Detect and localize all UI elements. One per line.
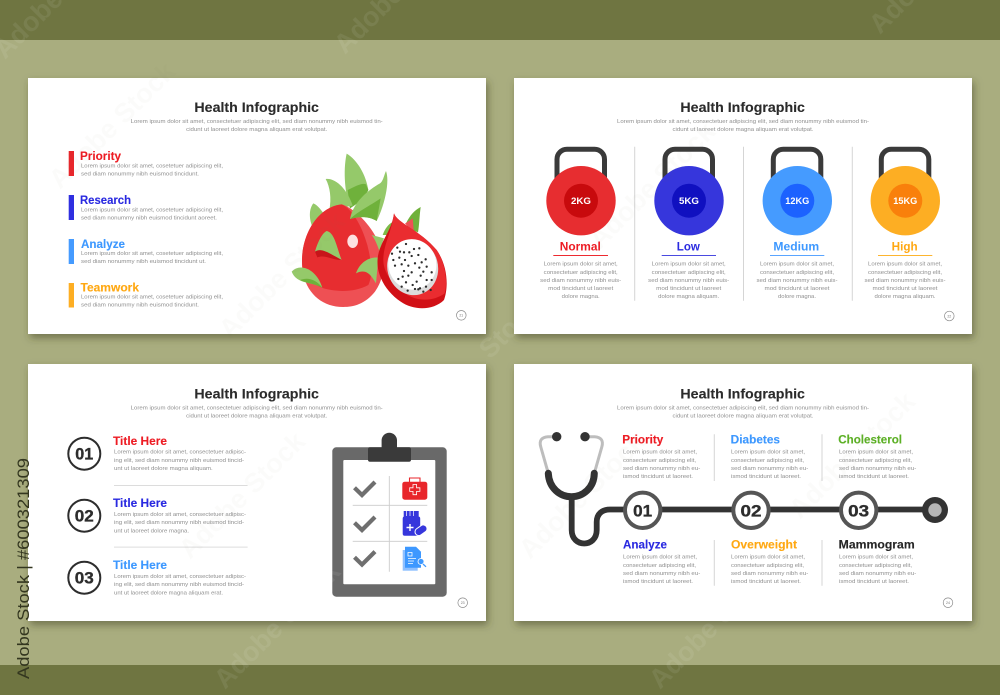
block: Priority: ismod tincidunt ut laoreet. [623, 474, 693, 480]
intro text: Lorem ipsum dolor sit amet, consectetuer adipiscing elit, sed diam nonummy nibh euismod tin- [617, 406, 869, 412]
step 01: unt ut laoreet dolore magna aliquam. [114, 466, 213, 472]
page number 21: 21 [459, 314, 463, 318]
intro text: Lorem ipsum dolor sit amet, consectetuer adipiscing elit, sed diam nonummy nibh euismod tin- [617, 119, 869, 125]
block: Overweight [731, 540, 808, 585]
block: Mammogram: ismod tincidunt ut laoreet. [839, 579, 909, 585]
kettlebell: 5KG Low: consectetuer adipiscing elit, [652, 270, 726, 276]
block: Diabetes: sed diam nonummy nibh eu- [731, 466, 808, 472]
illustration: stethoscope timeline [540, 432, 948, 544]
block: Priority: Lorem ipsum dolor sit amet, [623, 450, 697, 456]
kettlebell: 5KG Low: dolore magna aliquam. [658, 294, 720, 300]
block: Diabetes: consectetuer adipiscing elit, [731, 458, 804, 464]
step 02: unt ut laoreet dolore magna. [114, 528, 189, 534]
title: Health Infographic [680, 386, 805, 402]
page number 24: 24 [946, 601, 950, 605]
block: Analyze: ismod tincidunt ut laoreet. [623, 579, 693, 585]
block: Cholesterol: sed diam nonummy nibh eu- [839, 466, 916, 472]
step 02: ing elit, sed diam nonummy nibh euismod tincid- [114, 520, 244, 526]
item: Teamwork: Teamwork [80, 282, 140, 294]
block: Priority: Priority [622, 435, 664, 447]
item: Analyze: Lorem ipsum dolor sit amet, cosetetuer adipiscing elit, [81, 251, 223, 257]
kettlebell: 15KG High: Lorem ipsum dolor sit amet, [868, 262, 942, 268]
kettlebell: 12KG Medium: sed diam nonummy nibh euis- [756, 278, 838, 284]
kettlebell: 5KG Low [648, 149, 729, 300]
block: Overweight: Overweight [731, 540, 797, 552]
icon: first aid kit [402, 478, 427, 500]
watermark: Adobe Stock [513, 426, 652, 564]
item: Research: sed diam nonummy nibh euismod tincidunt aoreet. [81, 215, 217, 221]
illustration: dragon fruit [292, 154, 447, 308]
kettlebell: 2KG Normal: Lorem ipsum dolor sit amet, [544, 262, 618, 268]
block: Overweight: Lorem ipsum dolor sit amet, [731, 555, 805, 561]
panel: numbered list and clipboard [28, 364, 486, 621]
intro text: Lorem ipsum dolor sit amet, consectetuer adipiscing elit, sed diam nonummy nibh euismod tin- [131, 119, 383, 125]
watermark: Adobe Stock [213, 206, 352, 344]
kettlebell: 12KG Medium: mod tincidunt ut laoreet [764, 286, 830, 292]
kettlebell: 15KG High: consectetuer adipiscing elit, [868, 270, 942, 276]
block: Cholesterol: consectetuer adipiscing elit, [839, 458, 912, 464]
block: Diabetes [731, 435, 808, 480]
icon: document with magnifier [403, 547, 426, 571]
icon: medicine bottle and pill [403, 511, 429, 537]
intro text [131, 119, 383, 133]
block: Overweight: sed diam nonummy nibh eu- [731, 571, 808, 577]
watermark: Stock [473, 290, 547, 364]
item: Teamwork: sed diam nonummy nibh euismod tincidunt. [81, 303, 199, 309]
watermark: Adobe Stock [583, 116, 722, 254]
title: Health Infographic [194, 99, 319, 115]
intro text [131, 406, 383, 420]
kettlebell: 12KG Medium [756, 149, 838, 300]
illustration: clipboard [332, 433, 447, 597]
page number 22: 22 [947, 314, 951, 318]
node 02 [733, 493, 769, 528]
node 03: 03 [848, 502, 869, 520]
page number 23: 23 [461, 601, 465, 605]
item: Priority: sed diam nonummy nibh euismod tincidunt. [81, 172, 199, 178]
kettlebell: 15KG High: dolore magna aliquam. [874, 294, 936, 300]
block: Analyze: Analyze [623, 540, 667, 552]
item: Research: Research [80, 195, 131, 207]
node 03 [841, 493, 876, 528]
intro text: cidunt ut laoreet dolore magna aliquam erat volutpat. [672, 414, 814, 420]
intro text: cidunt ut laoreet dolore magna aliquam erat volutpat. [186, 127, 328, 133]
step 03: unt ut laoreet dolore magna aliquam erat. [114, 590, 223, 596]
step 01: ing elit, sed diam nonummy nibh euismod tincid- [114, 458, 244, 464]
item: Analyze: Analyze [81, 239, 125, 251]
step 01: Lorem ipsum dolor sit amet, consectetuer adipisc- [114, 450, 246, 456]
item: Analyze [69, 239, 223, 265]
kettlebell: 2KG Normal: consectetuer adipiscing elit, [544, 270, 618, 276]
item: Teamwork [69, 282, 223, 309]
block: Analyze: Lorem ipsum dolor sit amet, [623, 555, 697, 561]
block: Diabetes: Diabetes [731, 435, 780, 447]
panel: stethoscope timeline [514, 364, 972, 621]
kettlebell: 5KG Low: Lorem ipsum dolor sit amet, [652, 262, 726, 268]
item: Research: Lorem ipsum dolor sit amet, cosetetuer adipiscing elit, [81, 207, 223, 213]
watermark: Adobe Stock [783, 386, 922, 524]
step 02: Lorem ipsum dolor sit amet, consectetuer adipisc- [114, 512, 246, 518]
node 01 [625, 493, 660, 528]
page number 21 [456, 310, 466, 320]
block: Analyze: sed diam nonummy nibh eu- [623, 571, 700, 577]
block: Mammogram: Mammogram [839, 540, 915, 552]
block: Cholesterol [838, 435, 916, 480]
block: Overweight: consectetuer adipiscing elit, [731, 563, 804, 569]
step 01: 01 [75, 445, 93, 464]
kettlebell: 12KG Medium: 12KG [785, 196, 809, 207]
block: Overweight: ismod tincidunt ut laoreet. [731, 579, 801, 585]
kettlebell: 5KG Low: mod tincidunt ut laoreet [656, 286, 722, 292]
item: Teamwork: Lorem ipsum dolor sit amet, cosetetuer adipiscing elit, [81, 295, 223, 301]
kettlebell: 5KG Low: 5KG [679, 196, 699, 207]
kettlebell: 2KG Normal: mod tincidunt ut laoreet [548, 286, 614, 292]
intro text [617, 119, 869, 133]
watermark: Adobe Stock [643, 556, 782, 694]
kettlebell: 15KG High: sed diam nonummy nibh euis- [864, 278, 946, 284]
node 02: 02 [740, 502, 762, 520]
node 01: 01 [633, 502, 652, 520]
kettlebell: 2KG Normal: sed diam nonummy nibh euis- [540, 278, 621, 284]
step 01 [68, 436, 246, 472]
block: Priority: consectetuer adipiscing elit, [623, 458, 696, 464]
kettlebell: 12KG Medium: dolore magna. [778, 294, 816, 300]
title: Health Infographic [194, 386, 319, 402]
intro text: cidunt ut laoreet dolore magna aliquam erat volutpat. [186, 414, 328, 420]
page number 22 [944, 311, 954, 321]
block: Analyze: consectetuer adipiscing elit, [623, 563, 696, 569]
item: Priority [69, 151, 223, 178]
page number 23 [458, 598, 468, 608]
intro text: Lorem ipsum dolor sit amet, consectetuer adipiscing elit, sed diam nonummy nibh euismod tin- [131, 406, 383, 412]
intro text [617, 406, 869, 420]
kettlebell: 12KG Medium: Lorem ipsum dolor sit amet, [760, 262, 834, 268]
block: Mammogram: consectetuer adipiscing elit, [839, 563, 912, 569]
watermark: Adobe Stock [43, 56, 182, 194]
title: Health Infographic [680, 99, 805, 115]
block: Diabetes: Lorem ipsum dolor sit amet, [731, 450, 805, 456]
watermark: Adobe Stock [173, 426, 312, 564]
stock credit: Adobe Stock | #600321309 [15, 458, 33, 679]
kettlebell: 5KG Low: sed diam nonummy nibh euis- [648, 278, 729, 284]
page number 24 [943, 598, 953, 608]
block: Priority: sed diam nonummy nibh eu- [623, 466, 700, 472]
kettlebell: 5KG Low: Low [677, 242, 700, 254]
kettlebell: 15KG High: High [892, 242, 918, 254]
step 03: 03 [75, 569, 94, 588]
block: Cholesterol: Lorem ipsum dolor sit amet, [839, 450, 913, 456]
step 03 [68, 560, 246, 596]
watermark: Adobe Stock [208, 556, 347, 694]
kettlebell: 15KG High: mod tincidunt ut laoreet [872, 286, 938, 292]
item: Analyze: sed diam nonummy nibh euismod tincidunt ut. [81, 259, 206, 265]
icon: check marks [354, 482, 375, 565]
block: Cholesterol: Cholesterol [838, 435, 902, 447]
intro text: cidunt ut laoreet dolore magna aliquam erat volutpat. [672, 127, 814, 133]
kettlebell: 12KG Medium: Medium [773, 242, 819, 254]
panel: dragon fruit list [28, 78, 486, 334]
kettlebell: 2KG Normal: 2KG [571, 196, 591, 207]
step 02: 02 [75, 507, 94, 526]
block: Mammogram: sed diam nonummy nibh eu- [839, 571, 916, 577]
block: Diabetes: ismod tincidunt ut laoreet. [731, 474, 801, 480]
kettlebell: 2KG Normal: dolore magna. [562, 294, 600, 300]
step 02 [68, 498, 246, 534]
item: Priority: Lorem ipsum dolor sit amet, cosetetuer adipiscing elit, [81, 164, 223, 170]
item: Research [69, 195, 223, 221]
step 03: ing elit, sed diam nonummy nibh euismod tincid- [114, 582, 244, 588]
block: Cholesterol: ismod tincidunt ut laoreet. [839, 474, 909, 480]
kettlebell: 15KG High: 15KG [893, 196, 917, 207]
block: Priority [622, 435, 700, 480]
chest piece [922, 497, 948, 523]
kettlebell: 2KG Normal [540, 149, 621, 300]
step 03: Title Here [113, 560, 167, 572]
block: Mammogram: Lorem ipsum dolor sit amet, [839, 555, 913, 561]
item: Priority: Priority [80, 151, 122, 163]
step 03: Lorem ipsum dolor sit amet, consectetuer adipisc- [114, 574, 246, 580]
block: Analyze [623, 540, 700, 585]
kettlebell: 12KG Medium: consectetuer adipiscing elit, [760, 270, 834, 276]
panel: kettlebell weights [514, 78, 972, 334]
kettlebell: 15KG High [864, 149, 946, 300]
kettlebell: 2KG Normal: Normal [560, 242, 601, 254]
step 02: Title Here [113, 498, 167, 510]
block: Mammogram [839, 540, 916, 585]
step 01: Title Here [113, 436, 167, 448]
